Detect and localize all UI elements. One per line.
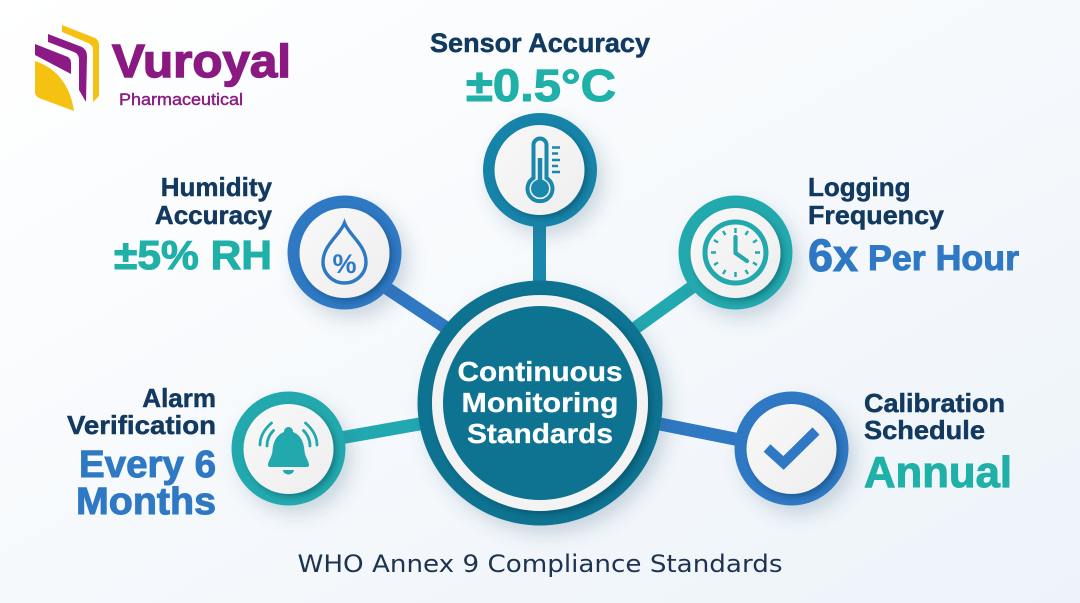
heading: alarm verification: Verification — [67, 410, 216, 440]
heading: alarm verification — [67, 383, 216, 523]
connector: logging frequency — [634, 285, 695, 329]
heading: alarm verification: Months — [76, 481, 216, 523]
node: thermometer — [483, 113, 597, 227]
center title: Standards — [467, 418, 613, 449]
heading: calibration schedule: Schedule — [864, 415, 985, 445]
heading: sensor accuracy — [430, 28, 650, 111]
heading: humidity accuracy: ±5% RH — [114, 232, 272, 278]
heading: humidity accuracy — [114, 172, 273, 278]
connector: humidity accuracy — [385, 287, 448, 329]
icon: bell — [260, 423, 317, 474]
logo wordmark: Vuroyal — [112, 35, 291, 87]
heading: logging frequency: 6x — [808, 230, 858, 281]
logo: Vuroyal Pharmaceutical — [35, 25, 291, 111]
heading: sensor accuracy: ±0.5°C — [466, 60, 616, 111]
heading: logging frequency: Frequency — [808, 200, 945, 230]
heading: logging frequency: Per Hour — [868, 239, 1019, 278]
heading: humidity accuracy: Humidity — [161, 172, 273, 202]
center hub — [418, 280, 662, 526]
heading: logging frequency — [808, 172, 1019, 281]
heading: calibration schedule: Calibration — [864, 388, 1005, 418]
logo mark — [35, 25, 99, 111]
heading: logging frequency: Logging — [808, 172, 911, 202]
node: clock — [678, 196, 792, 310]
icon: check — [767, 431, 816, 463]
heading: alarm verification: Every 6 — [79, 444, 216, 486]
connector: alarm verification — [340, 423, 425, 438]
heading: sensor accuracy: Sensor Accuracy — [430, 28, 650, 58]
heading: calibration schedule: Annual — [864, 448, 1012, 497]
heading: alarm verification: Alarm — [142, 383, 216, 413]
connector: calibration schedule — [655, 423, 745, 441]
heading: humidity accuracy: Accuracy — [155, 200, 273, 230]
footer caption: WHO Annex 9 Compliance Standards — [298, 550, 782, 578]
logo subtitle: Pharmaceutical — [119, 91, 243, 109]
connector: sensor accuracy — [533, 220, 546, 285]
center title — [458, 356, 622, 449]
icon: water drop with percent: % — [332, 249, 357, 279]
node: alarm bell — [232, 392, 346, 506]
center title: Monitoring — [462, 387, 618, 418]
node: humidity — [288, 196, 402, 310]
icon: thermometer — [527, 138, 560, 201]
icon: clock — [705, 222, 766, 283]
heading: calibration schedule — [864, 388, 1012, 497]
center title: Continuous — [458, 356, 622, 387]
node: checkmark — [734, 392, 848, 506]
